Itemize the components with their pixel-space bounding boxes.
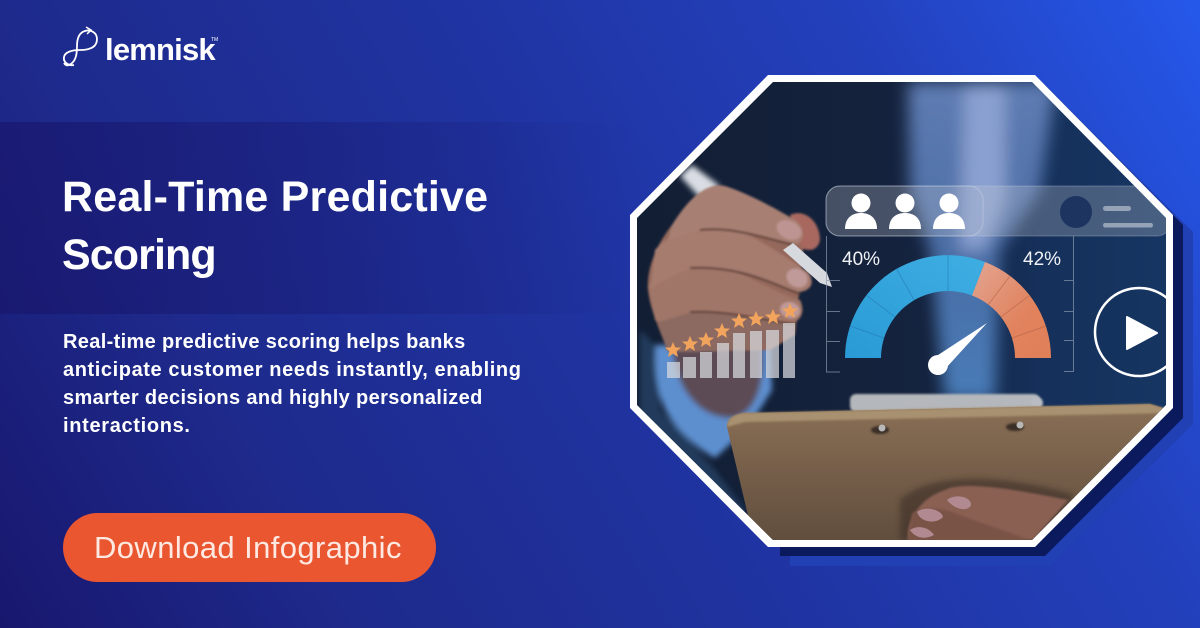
inner dark shadow (780, 85, 1183, 556)
rating bars (667, 323, 795, 378)
title (62, 173, 488, 279)
chart axes (826, 236, 1074, 372)
description text: anticipate customer needs instantly, enabling (63, 359, 522, 381)
outer light shadow (790, 90, 1193, 566)
avatar circle (1060, 196, 1092, 228)
download button (63, 513, 436, 582)
description text: interactions. (63, 415, 191, 437)
icon: person 2 (889, 194, 921, 229)
photo scene (630, 75, 1183, 550)
shirt and tie (908, 82, 1056, 400)
lower hand (662, 314, 783, 349)
hand base (648, 225, 805, 352)
pen back (680, 165, 720, 200)
shirt cuff and sleeve (638, 331, 776, 513)
gauge needle (928, 323, 987, 375)
background band behind title (0, 122, 640, 314)
thumb (790, 213, 820, 250)
logo wordmark: lemnisk (105, 32, 215, 67)
description text (63, 331, 522, 437)
ring finger (648, 266, 802, 322)
suit background (630, 75, 1175, 550)
icon: play button (1094, 286, 1166, 378)
nails (776, 220, 802, 240)
octagon photo panel (630, 75, 1193, 566)
title: Scoring (62, 231, 216, 279)
header glass bar (826, 186, 1171, 236)
label: 40%: 40% (842, 249, 880, 270)
gauge chart (845, 255, 1051, 358)
pen tip (783, 243, 832, 287)
icon: person 1 (845, 194, 877, 229)
placeholder text lines (1103, 206, 1153, 228)
index finger (668, 185, 803, 245)
icon: person 3 (933, 194, 965, 229)
hand under clipboard (900, 479, 1075, 540)
trademark: TM (211, 37, 218, 43)
button label: Download Infographic (94, 530, 402, 565)
white octagon frame (630, 75, 1173, 547)
clipboard (727, 394, 1170, 545)
title: Real-Time Predictive (62, 173, 488, 221)
description text: smarter decisions and highly personalized (63, 387, 483, 409)
finger creases (690, 229, 800, 324)
middle finger (650, 224, 812, 292)
logo (62, 26, 218, 67)
label: 42%: 42% (1023, 249, 1061, 270)
icon: lemniscate logo mark (62, 26, 98, 66)
rating stars (665, 303, 798, 357)
hand (648, 185, 820, 352)
description text: Real-time predictive scoring helps banks (63, 331, 466, 353)
